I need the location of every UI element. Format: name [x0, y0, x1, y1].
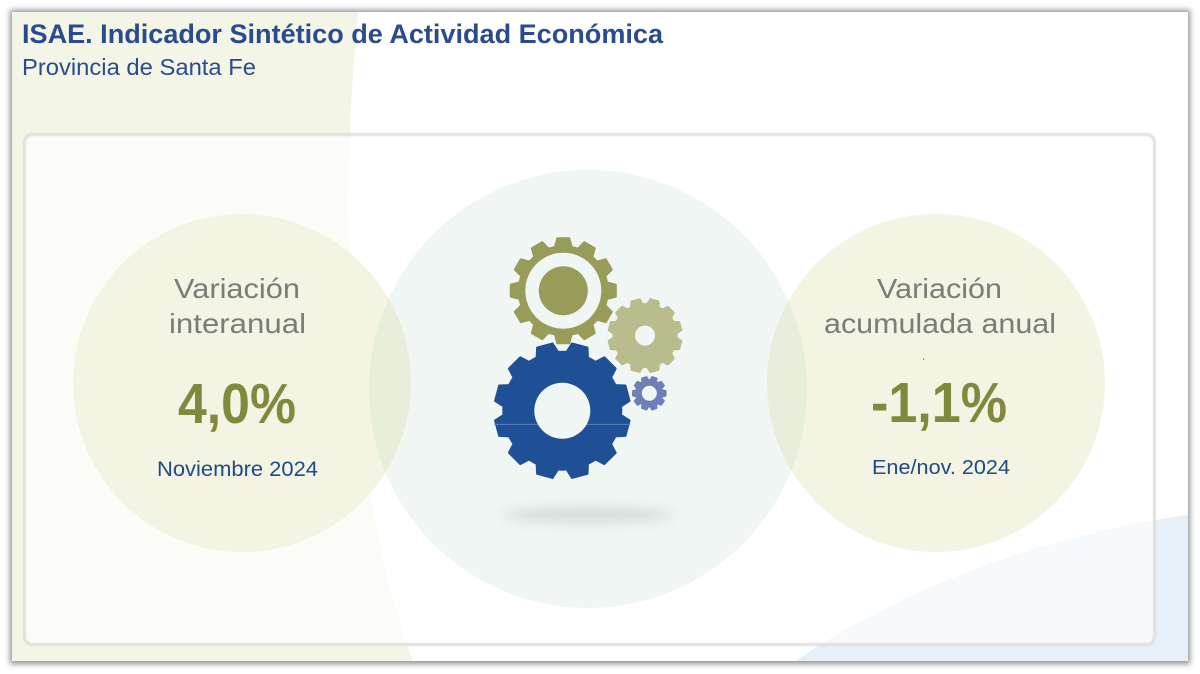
gear: periwinkle small — [633, 377, 666, 410]
period: noviembre 2024: Noviembre 2024 — [157, 458, 318, 481]
value: -1,1%: -1,1% — [871, 371, 1007, 435]
gear: blue large — [494, 343, 630, 479]
label: variación acumulada anual: Variación — [877, 273, 1002, 304]
panel: cumulative annual variation — [824, 273, 1056, 479]
label: variación acumulada anual — [824, 273, 1056, 339]
label: variación acumulada anual: acumulada anual — [824, 308, 1056, 339]
gear: tan medium — [608, 299, 682, 372]
label: variación interanual: Variación — [174, 273, 300, 304]
period: ene/nov 2024: Ene/nov. 2024 — [872, 456, 1010, 479]
gear: olive large — [511, 238, 616, 343]
subtitle: Provincia de Santa Fe — [22, 54, 256, 80]
icon: gears — [494, 238, 682, 523]
label: variación interanual: interanual — [169, 308, 306, 339]
label: variación interanual — [169, 273, 306, 339]
speck — [923, 358, 924, 360]
overlap: left and center circles — [369, 300, 411, 472]
overlap: right and center circles — [767, 302, 807, 470]
background shape: left green curve — [12, 12, 413, 661]
circle: center background — [369, 170, 807, 608]
gear shadow — [502, 507, 674, 523]
circle: right indicator background — [767, 214, 1105, 552]
background shape: bottom right blue curve — [795, 515, 1188, 661]
value: 4,0%: 4,0% — [178, 372, 296, 436]
title: ISAE. Indicador Sintético de Actividad Económica — [22, 19, 664, 49]
main panel — [24, 134, 1154, 644]
circle: left indicator background — [73, 214, 411, 552]
panel: interannual variation — [157, 273, 318, 481]
